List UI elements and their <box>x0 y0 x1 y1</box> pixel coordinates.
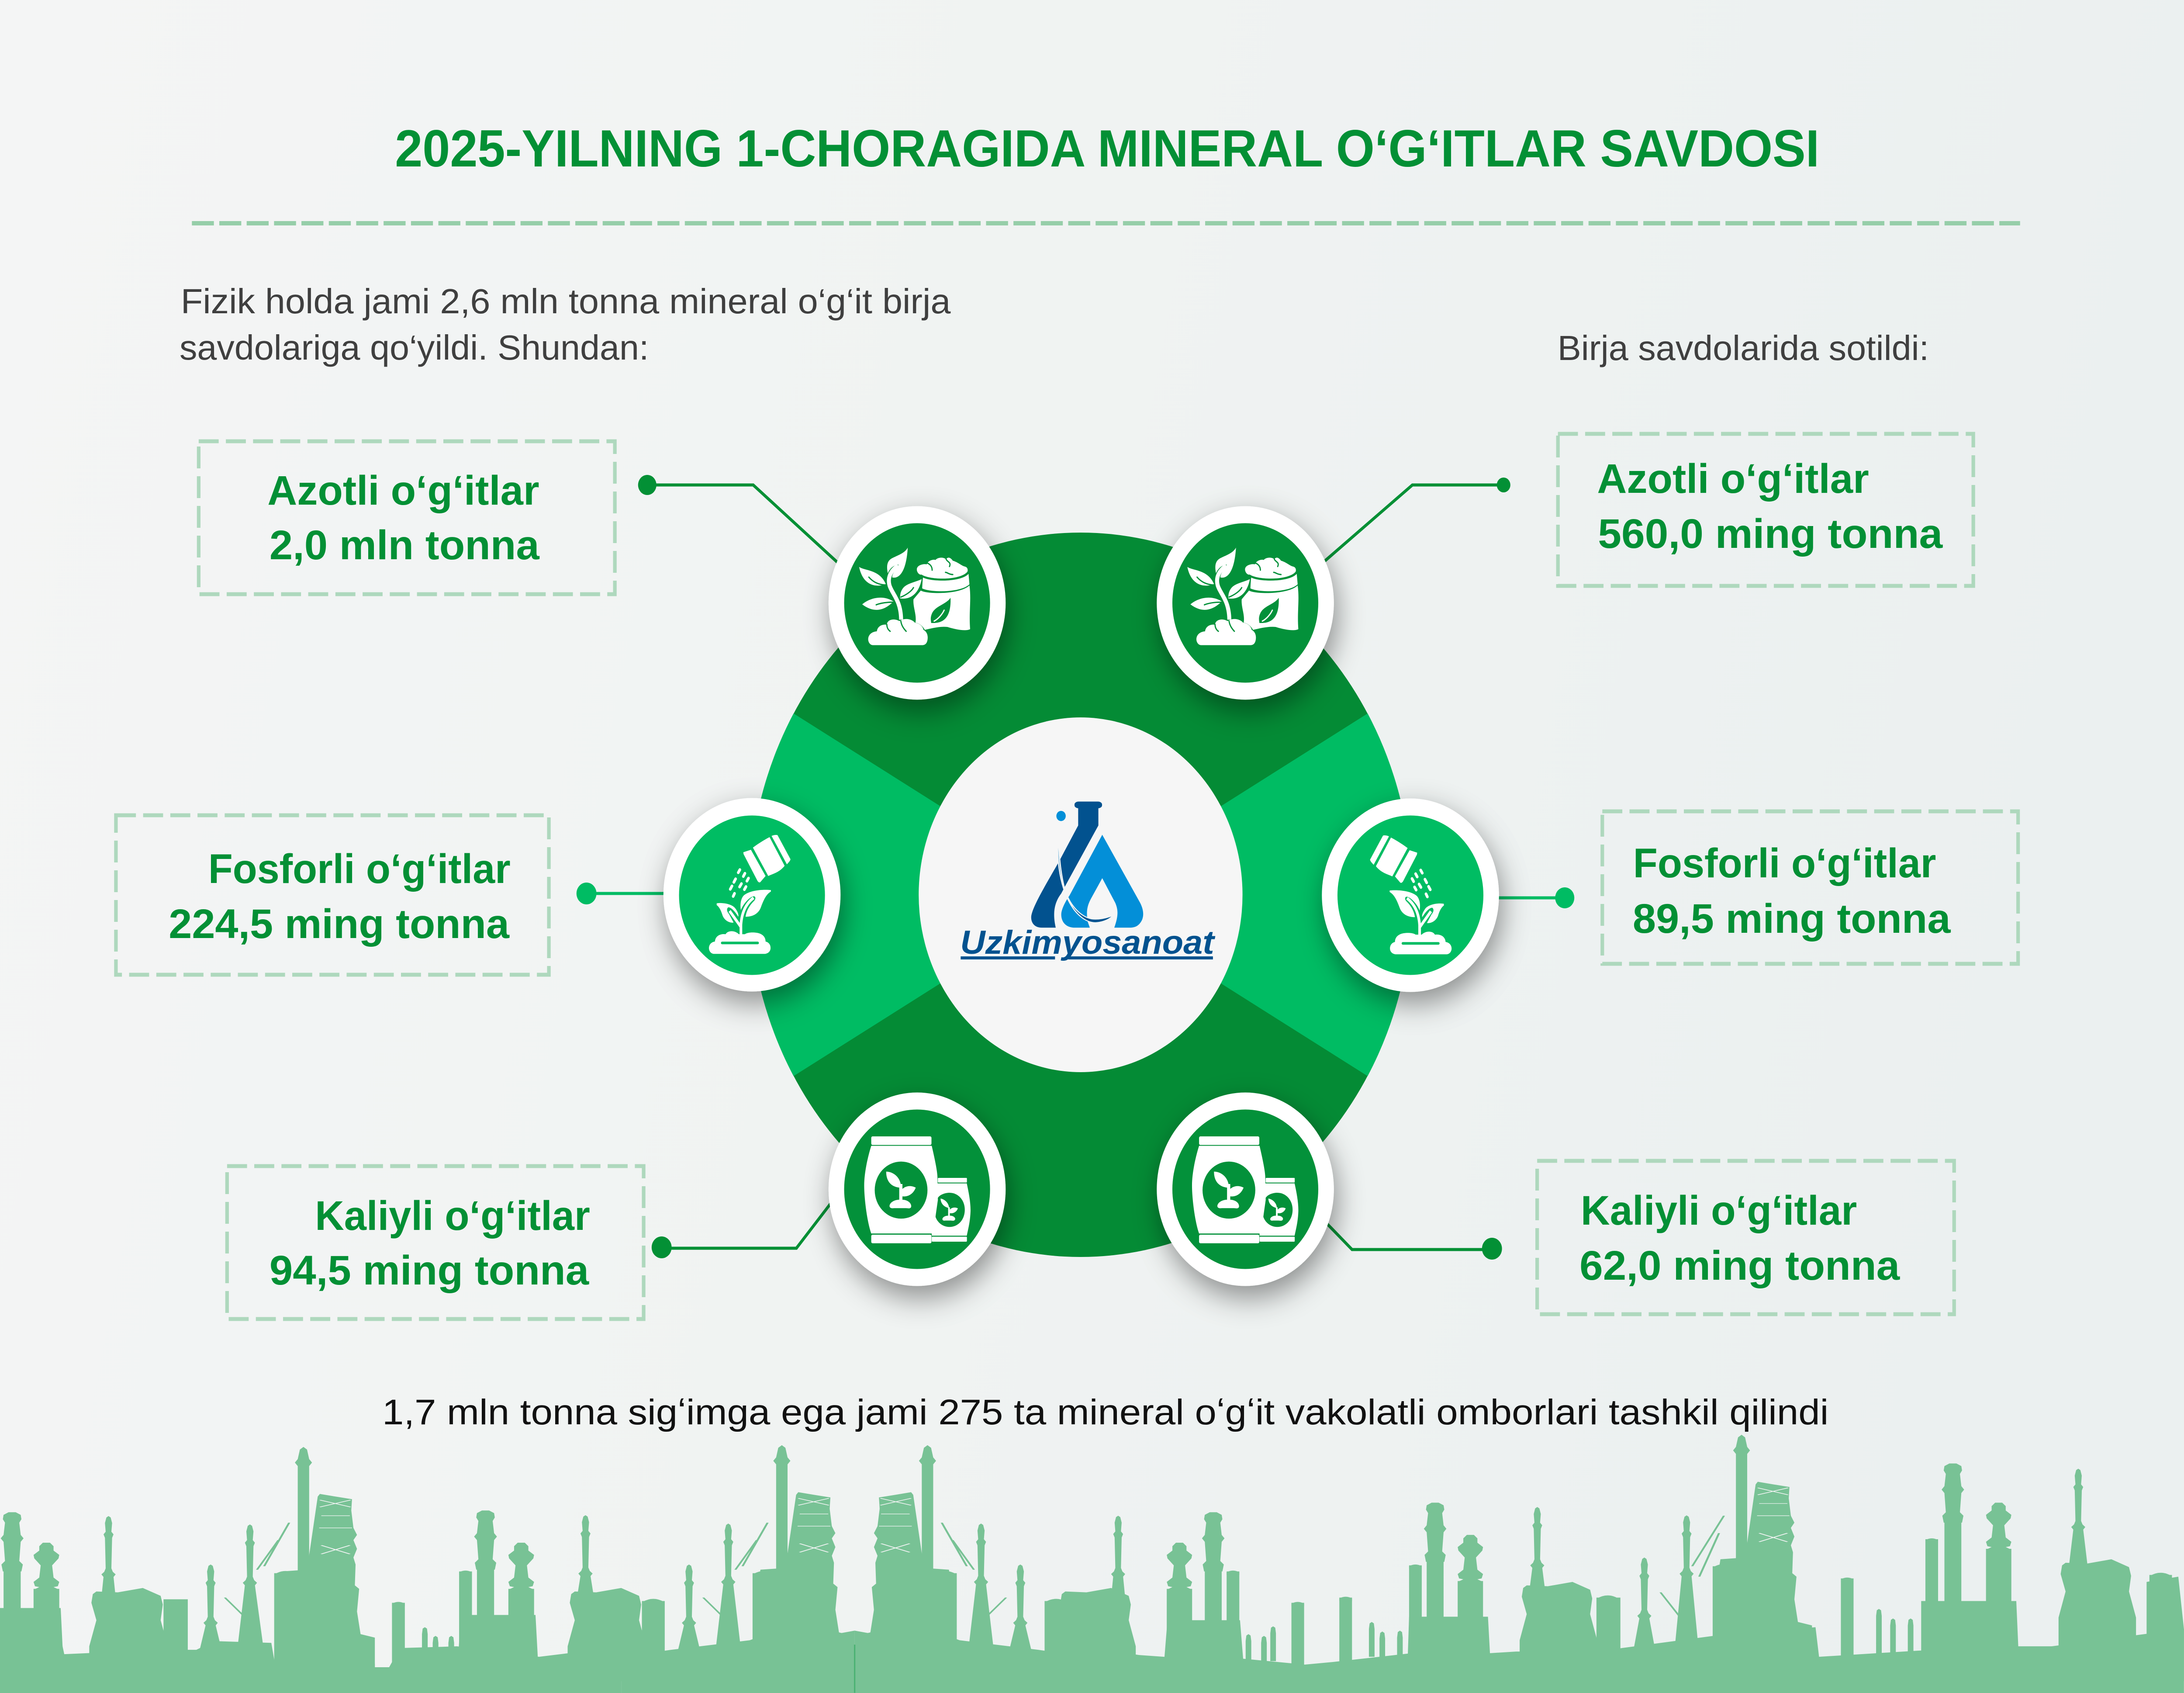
connector: right middle <box>1491 887 1574 908</box>
panel: potash supplied <box>227 1166 644 1319</box>
panel: phosphate supplied: 224,5 ming tonna <box>169 901 510 947</box>
panel: phosphate sold <box>1602 811 2018 964</box>
panel: nitrogen supplied: Azotli o‘g‘itlar <box>267 467 539 514</box>
panel: phosphate sold: Fosforli o‘g‘itlar <box>1633 840 1936 886</box>
icon: potash fertilizer left <box>829 1092 1006 1286</box>
panel: phosphate supplied: Fosforli o‘g‘itlar <box>208 846 511 892</box>
icon: nitrogen fertilizer right <box>1157 506 1334 700</box>
icon: potash fertilizer right <box>1157 1092 1334 1286</box>
panel: potash supplied: Kaliyli o‘g‘itlar <box>315 1193 590 1239</box>
intro text: supplied to exchange <box>180 282 951 367</box>
panel: phosphate supplied <box>116 815 549 975</box>
connector: left bottom <box>652 1197 836 1258</box>
intro text: supplied to exchange: savdolariga qo‘yildi. Shundan: <box>180 329 649 367</box>
connector: right bottom <box>1323 1220 1502 1260</box>
centre disc with logo <box>919 717 1243 1072</box>
footer note: 1,7 mln tonna sigʻimga ega jami 275 ta mineral oʻgʻit vakolatli omborlari tashkil qilindi <box>382 1392 1828 1432</box>
panel: nitrogen supplied: 2,0 mln tonna <box>270 522 540 568</box>
panel: nitrogen sold: Azotli o‘g‘itlar <box>1597 456 1869 502</box>
connector: right top <box>1319 478 1510 566</box>
logo: flask and drop <box>1031 802 1143 928</box>
icon: phosphate fertilizer right <box>1322 799 1499 992</box>
logo wordmark: Uzkimyosanoat <box>960 924 1216 961</box>
intro text: supplied to exchange: Fizik holda jami 2,6 mln tonna mineral o‘g‘it birja <box>181 282 951 321</box>
panel: nitrogen sold <box>1558 434 1973 586</box>
icon: nitrogen fertilizer left <box>829 506 1006 700</box>
connector: left middle <box>577 883 672 904</box>
panel: potash sold: 62,0 ming tonna <box>1579 1243 1901 1289</box>
title divider <box>192 221 2020 225</box>
icon: phosphate fertilizer left <box>663 798 840 992</box>
panel: potash supplied: 94,5 ming tonna <box>270 1247 590 1294</box>
panel: potash sold <box>1537 1161 1954 1314</box>
panel: nitrogen sold: 560,0 ming tonna <box>1598 511 1943 557</box>
panel: phosphate sold: 89,5 ming tonna <box>1633 896 1951 942</box>
title: 2025-YILNING 1-CHORAGIDA MINERAL O‘G‘ITLAR SAVDOSI <box>395 120 1819 178</box>
panel: potash sold: Kaliyli o‘g‘itlar <box>1581 1188 1857 1234</box>
intro text: sold on exchange: Birja savdolarida sotildi: <box>1558 329 1929 368</box>
connector: left top <box>638 475 843 568</box>
panel: nitrogen supplied <box>199 441 615 594</box>
skyline: refinery silhouette <box>0 1435 2184 1693</box>
logo underline <box>961 956 1213 959</box>
donut chart: central wheel <box>749 533 1412 1257</box>
